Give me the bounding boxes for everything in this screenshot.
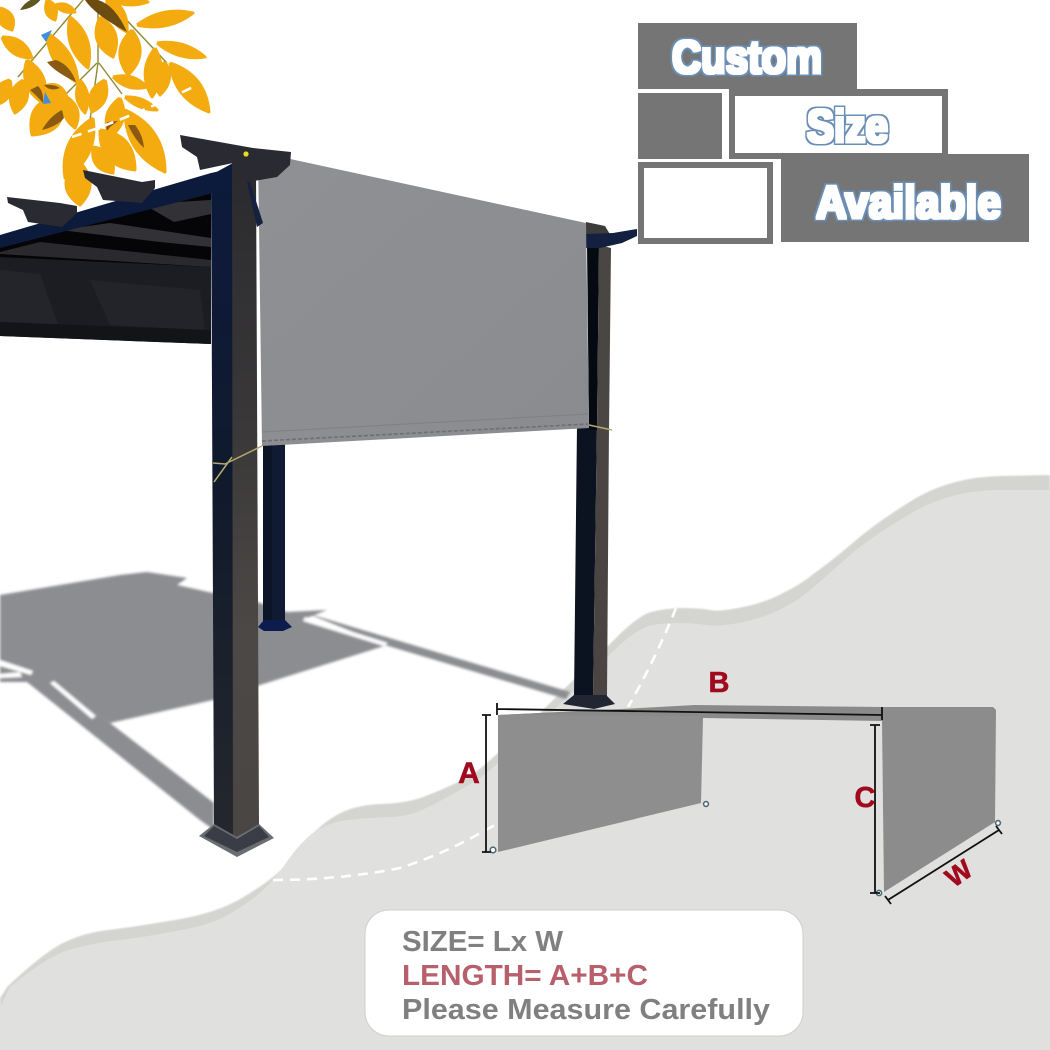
rafter end 3 [7,197,77,227]
heading: Size: Size [807,100,888,152]
label A: A [458,757,480,790]
label C: C [855,782,876,814]
grommets [490,802,1000,896]
label W: W [940,854,978,893]
right drop of fabric [882,707,996,892]
left drop of fabric [498,706,703,852]
formula callout [365,910,803,1036]
front post [199,160,274,857]
heading: Custom: Custom [672,31,822,83]
front rafter end with bolt [180,135,291,227]
fabric measurement diagram [458,667,1002,904]
rafter end 2 [83,170,155,203]
right rafter end [586,229,637,248]
pergola cast shadow [0,572,570,830]
measure note: Please Measure Carefully [402,994,770,1026]
tie ropes [213,425,612,482]
custom size badge blocks [638,23,1029,244]
size formula: SIZE= Lx W [402,926,563,958]
sun shade panel [253,148,589,446]
front beam [0,170,225,248]
length formula: LENGTH= A+B+C [402,960,648,992]
canopy roof slats [0,187,211,272]
right post [563,245,615,709]
label B: B [709,667,729,699]
back post [258,440,292,631]
top span of fabric [498,705,882,722]
dashes crossing leaves [72,87,193,137]
right post cap [586,222,611,238]
ground: curved grey hill [0,475,1050,1050]
front post base [199,824,274,857]
white dashed curve [273,608,676,880]
rolled canopy fabric [0,257,211,344]
right post base [563,695,615,709]
dimension lines [482,703,1002,904]
heading: Available: Available [816,176,1001,228]
autumn leaves branch [0,0,209,205]
